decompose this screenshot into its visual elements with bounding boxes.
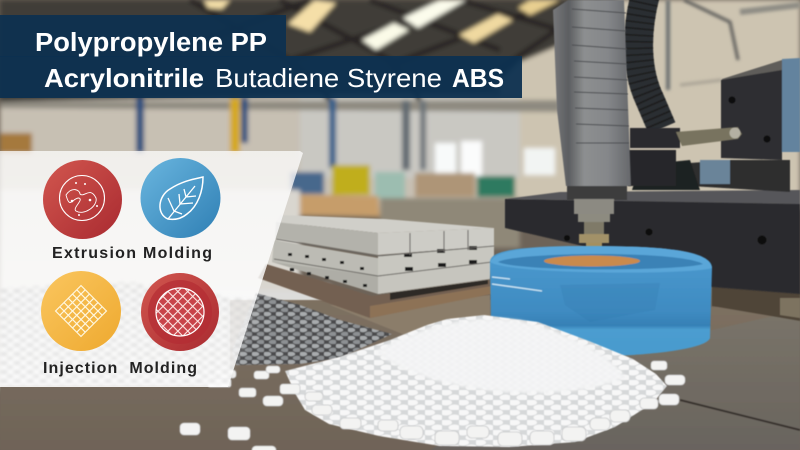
corrugated hose bbox=[639, 0, 662, 128]
machine base and right block bbox=[505, 58, 800, 294]
icon: yellow mesh bbox=[41, 271, 121, 351]
title banner bbox=[0, 15, 522, 98]
label: Injection Molding: Injection Molding bbox=[43, 360, 197, 377]
title line 2: ABS: ABS bbox=[452, 63, 504, 93]
label: Extrusion Molding: Extrusion Molding bbox=[52, 245, 212, 262]
scattered white pellets bbox=[180, 361, 685, 450]
icon: blue leaf bbox=[140, 158, 220, 238]
stacked grey plates on pallet bbox=[258, 215, 494, 318]
steel cylinder and nozzle bbox=[553, 0, 631, 257]
blue tub bbox=[490, 246, 712, 356]
title line 2: Butadiene Styrene: Butadiene Styrene bbox=[215, 63, 442, 93]
icon: red woven disc bbox=[141, 273, 219, 351]
floor bbox=[0, 286, 800, 450]
machine arm bbox=[628, 127, 742, 186]
grey pellets pile bbox=[232, 293, 392, 365]
translucent icon panel bbox=[0, 151, 303, 387]
title line 2: Acrylonitrile: Acrylonitrile bbox=[44, 63, 204, 93]
white pellet pile bbox=[285, 315, 667, 447]
title line 1: Polypropylene PP bbox=[35, 29, 267, 57]
icon: red extrusion melt bbox=[43, 160, 122, 239]
wall girders, right bbox=[668, 0, 800, 90]
